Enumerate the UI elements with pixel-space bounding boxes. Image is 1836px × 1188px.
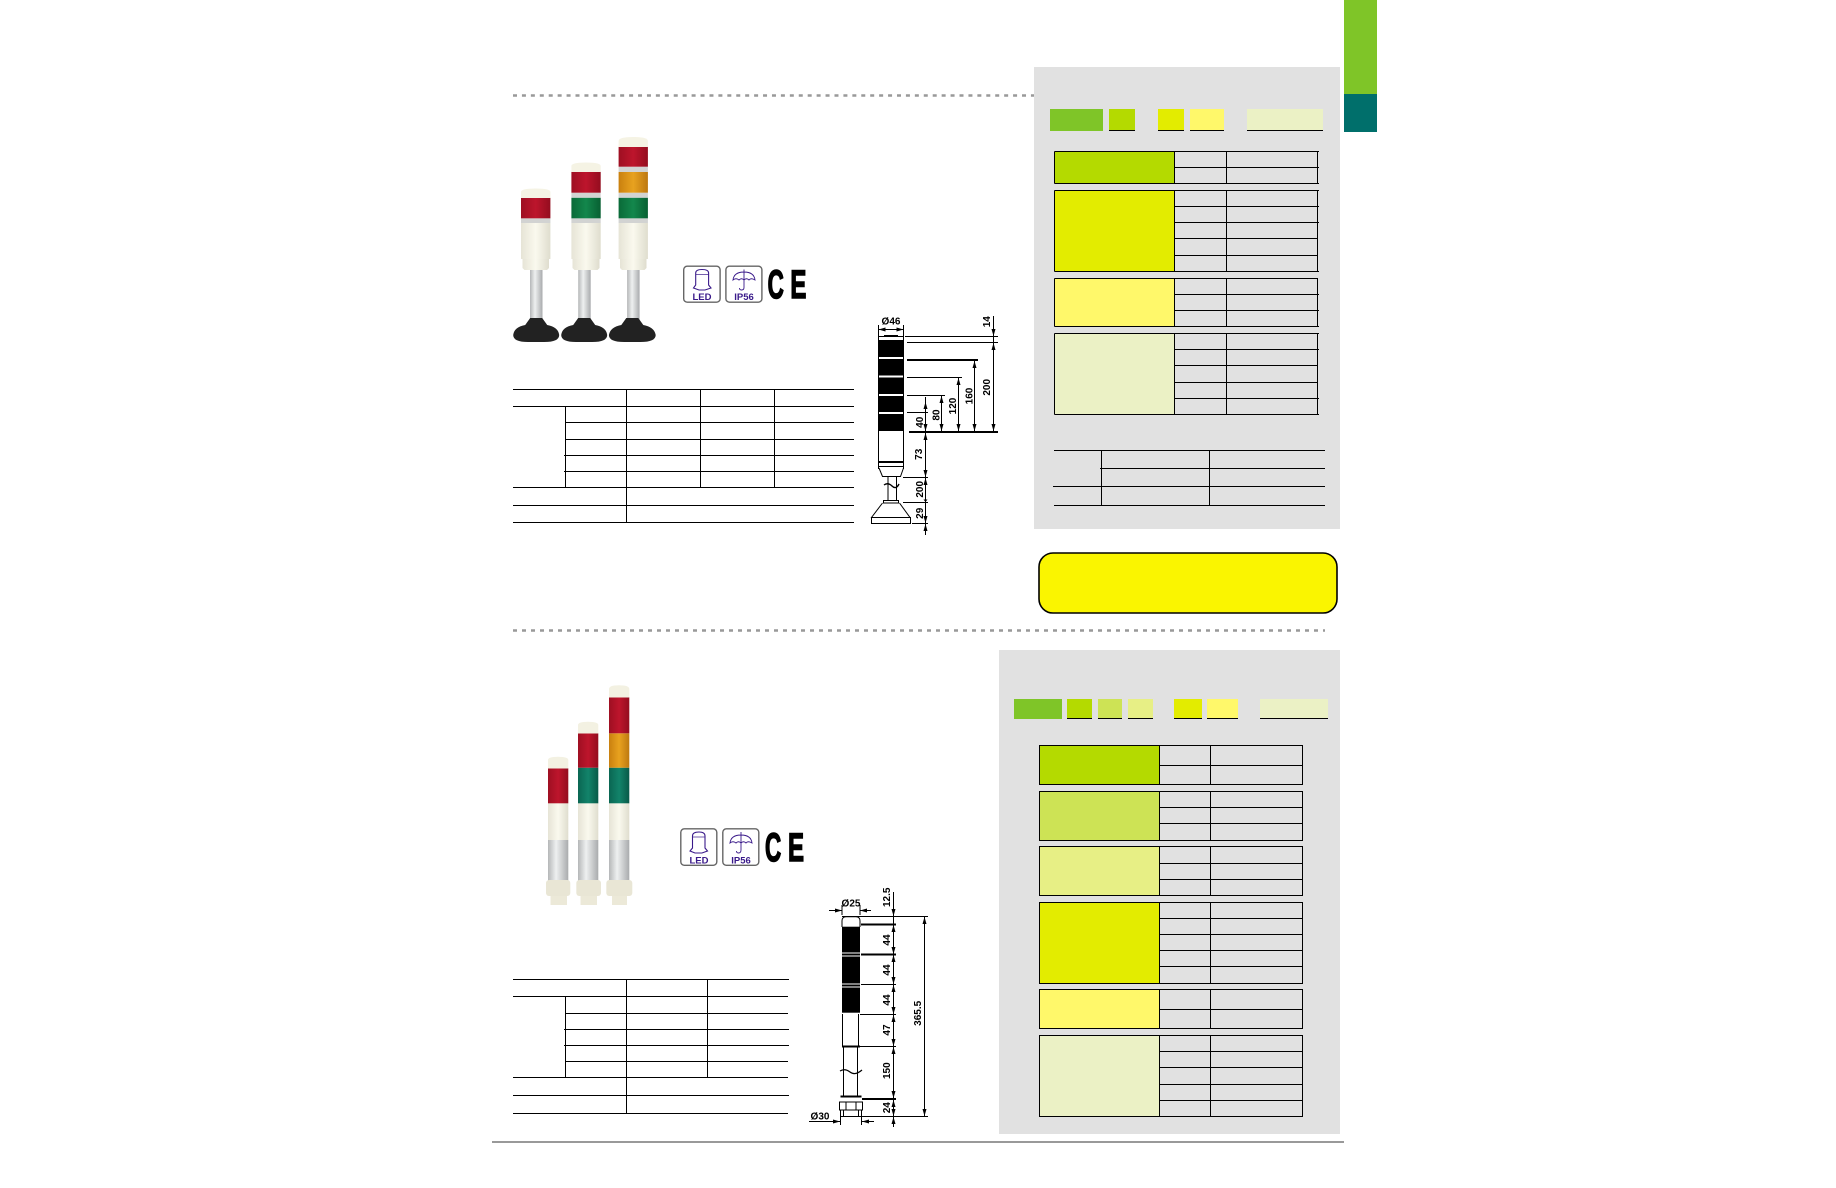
upper model table 2 <box>1054 190 1319 272</box>
dimension labels: 150 <box>882 1062 893 1079</box>
divider: bottom page rule <box>492 1141 1344 1143</box>
tower three tier <box>606 685 632 905</box>
upper model table 3 <box>1054 278 1319 326</box>
dimension labels: Ø30 <box>811 1112 830 1122</box>
dimension arrows <box>878 328 996 531</box>
dimension labels: 44 <box>882 994 893 1006</box>
icon: LED badge lower: LED <box>690 856 709 866</box>
dimension labels: 160 <box>964 387 976 404</box>
upper model table 1 <box>1054 152 1319 184</box>
dimension labels: Ø25 <box>842 898 861 910</box>
dimension labels <box>882 316 993 519</box>
dimension labels: 200 <box>982 379 993 396</box>
icon: IP56 umbrella badge upper <box>726 266 762 303</box>
dimension labels: 80 <box>932 409 942 421</box>
lower model table 5 <box>1040 990 1302 1028</box>
dimension labels: 73 <box>914 448 925 460</box>
dimension labels: 29 <box>915 507 926 519</box>
photo: three lower tower lights <box>546 685 632 905</box>
lamp body outline <box>840 917 862 1116</box>
lower colour header swatches <box>1014 699 1328 719</box>
dimension labels: 200 <box>915 481 926 498</box>
tower one tier <box>546 757 570 905</box>
icon: CE mark upper <box>768 262 806 307</box>
dimension labels: Ø46 <box>882 316 901 328</box>
lower model table 6 <box>1040 1036 1302 1116</box>
dimension drawing: lower tower <box>809 887 928 1127</box>
icon: LED badge upper <box>684 266 720 303</box>
lower model table 2 <box>1040 792 1302 840</box>
icon: LED badge upper: LED <box>692 292 712 303</box>
divider: top dotted rule <box>513 94 1034 97</box>
upper colour header swatches <box>1050 109 1323 131</box>
panel: lower specification panel <box>999 650 1340 1134</box>
dimension labels <box>811 887 924 1122</box>
icon: CE mark lower: C <box>765 825 781 870</box>
icon: CE mark upper: C <box>768 262 784 307</box>
icon: IP56 umbrella badge upper: IP56 <box>734 292 754 303</box>
page tab: green and teal <box>1344 0 1377 132</box>
icon: CE mark lower <box>765 825 804 870</box>
lower model table 3 <box>1040 846 1302 896</box>
dimension labels: 44 <box>882 964 893 976</box>
dimension labels: 12.5 <box>882 887 893 907</box>
dimension lines <box>878 330 998 524</box>
upper accessory table <box>1053 450 1325 506</box>
dimension labels: 40 <box>915 416 926 428</box>
lower specification table <box>513 980 789 1114</box>
lower model table 4 <box>1040 902 1302 984</box>
panel: upper specification panel <box>1034 67 1340 529</box>
lower model table 1 <box>1040 746 1302 784</box>
dimension labels: 47 <box>882 1024 893 1036</box>
divider: middle dotted rule <box>513 629 1325 632</box>
dimension labels: 24 <box>882 1102 893 1113</box>
dimension labels: 44 <box>882 934 893 946</box>
tower one tier <box>513 188 559 342</box>
icon: IP56 umbrella badge lower <box>723 829 759 866</box>
dimension labels: 365.5 <box>913 1000 924 1026</box>
icon: IP56 umbrella badge lower: IP56 <box>731 856 751 866</box>
icon: LED badge lower <box>681 829 717 866</box>
dimension arrows <box>833 908 926 1124</box>
dimension drawing: upper tower <box>872 316 998 535</box>
photo: three upper tower lights <box>513 137 656 342</box>
icon: CE mark lower: E <box>788 825 804 869</box>
dimension lines <box>809 892 928 1127</box>
tower two tier <box>576 722 601 905</box>
lamp body outline <box>872 325 910 524</box>
tower three tier <box>609 137 656 342</box>
upper model table 4 <box>1054 334 1319 414</box>
tower two tier <box>561 162 607 342</box>
icon: CE mark upper: E <box>790 262 806 306</box>
dimension labels: 14 <box>982 316 993 327</box>
dimension labels: 120 <box>948 397 959 414</box>
upper specification table <box>513 390 854 522</box>
callout: yellow notice box <box>1039 553 1337 613</box>
